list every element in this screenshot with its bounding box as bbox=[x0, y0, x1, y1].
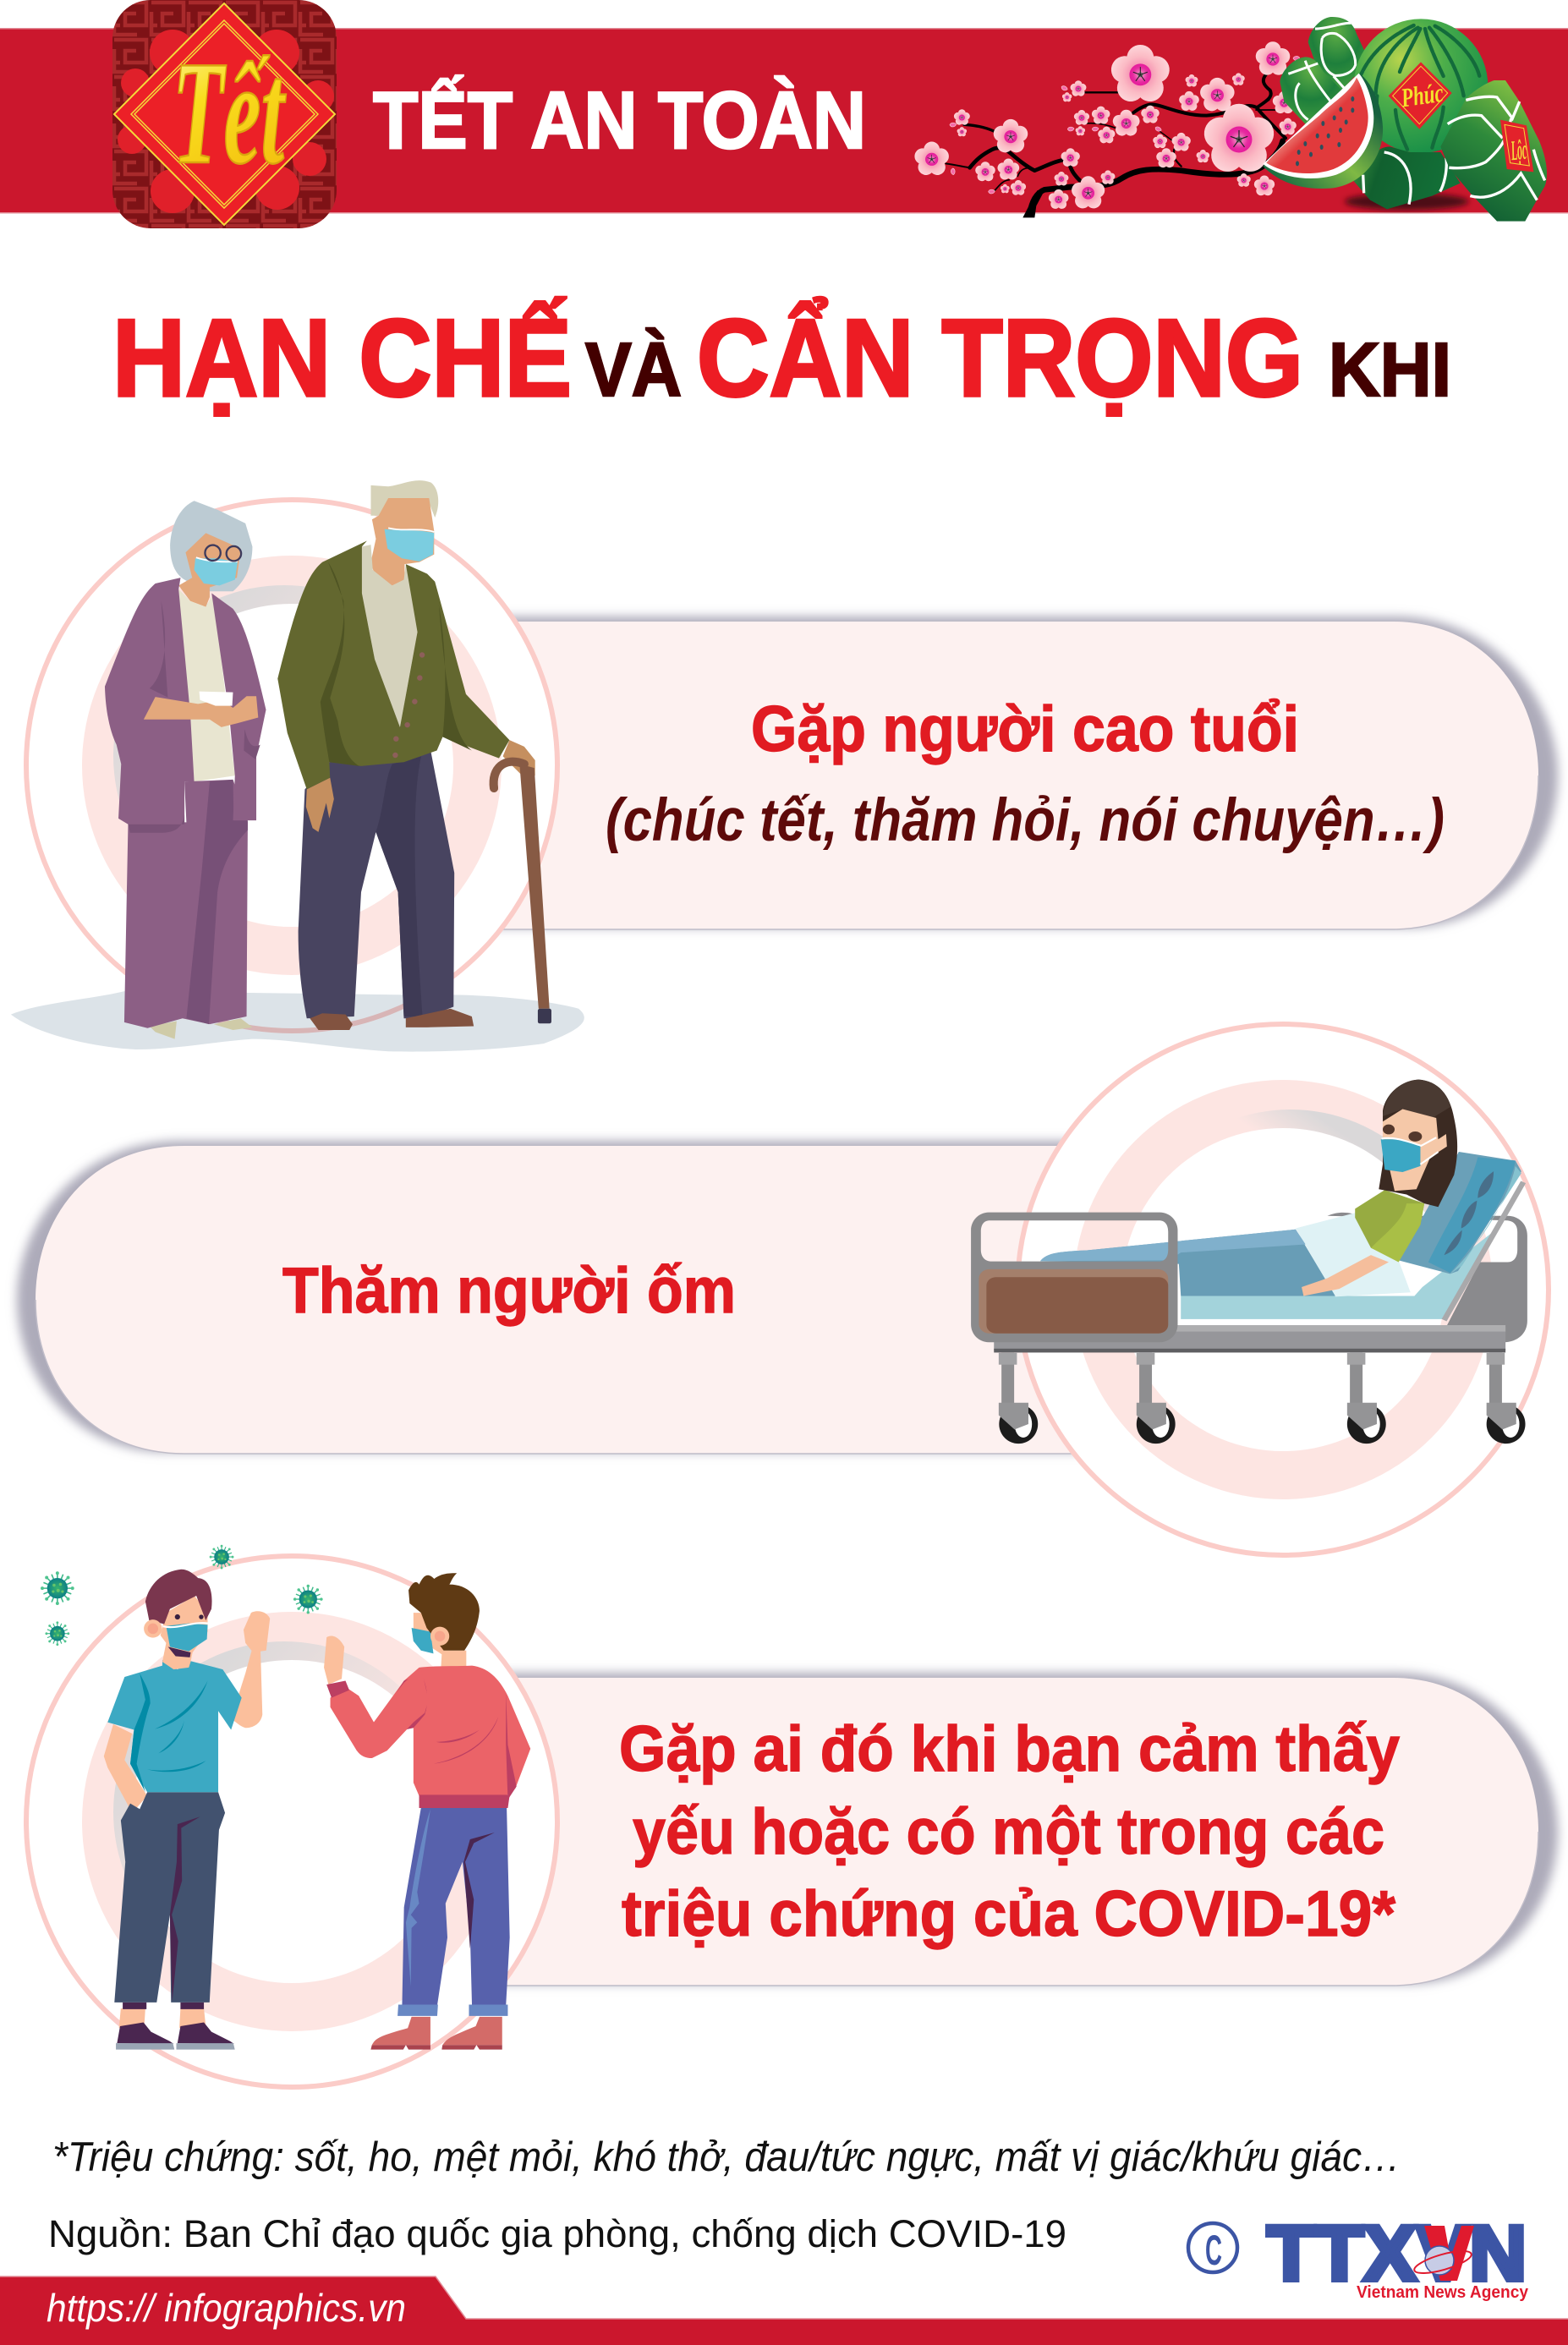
main heading: HẠN CHẾ bbox=[112, 296, 572, 419]
circle backdrop bbox=[1017, 1024, 1549, 1555]
header title: TẾT AN TOÀN bbox=[373, 74, 866, 166]
head frame bbox=[1327, 1213, 1527, 1342]
right man bbox=[324, 1573, 530, 2050]
left man bbox=[104, 1570, 270, 2050]
main heading bbox=[112, 296, 1451, 419]
pill: elderly bbox=[423, 616, 1558, 929]
circle backdrop bbox=[26, 1556, 557, 2087]
bánh chưng: right bbox=[1440, 80, 1547, 222]
bed base bbox=[994, 1325, 1505, 1352]
pillow bbox=[1399, 1152, 1521, 1274]
illustration: watermelon and bánh chưng bbox=[1263, 17, 1547, 222]
mattress bbox=[1181, 1182, 1521, 1319]
panel: elderly bbox=[11, 480, 1558, 1052]
watermelon slice bbox=[1263, 74, 1383, 189]
logo: copyright and TTXVN: Vietnam News Agency bbox=[1357, 2283, 1529, 2302]
pill: visiting the sick bbox=[17, 1141, 1099, 1454]
text: symptoms: yếu hoặc có một trong các bbox=[633, 1796, 1384, 1868]
head bbox=[1379, 1080, 1457, 1207]
ground shadow bbox=[11, 991, 584, 1052]
panel: visiting the sick bbox=[17, 1024, 1549, 1555]
icon: Tết tile bbox=[112, 0, 337, 228]
logo: copyright and TTXVN: TTXVN bbox=[1267, 2211, 1527, 2297]
text: meeting the elderly: (chúc tết, thăm hỏi, nói chuyện…) bbox=[606, 787, 1445, 854]
bánh chưng: top left bbox=[1308, 17, 1364, 90]
text: visiting the sick: Thăm người ốm bbox=[282, 1255, 736, 1327]
watermelon bbox=[1354, 19, 1488, 153]
man bbox=[277, 480, 551, 1030]
footer band with URL tab: https:// infographics.vn bbox=[47, 2286, 406, 2330]
illustration: two men greeting bbox=[41, 1545, 530, 2050]
panel: symptoms bbox=[26, 1545, 1558, 2087]
main heading: KHI bbox=[1329, 328, 1451, 413]
text: meeting the elderly: Gặp người cao tuổi bbox=[751, 693, 1299, 765]
shirt bbox=[1355, 1190, 1424, 1263]
text: symptoms bbox=[619, 1713, 1400, 1950]
bánh chưng: second bbox=[1280, 57, 1342, 124]
main heading: VÀ bbox=[585, 327, 682, 413]
footer band with URL tab bbox=[0, 2277, 1568, 2345]
illustration: elderly couple bbox=[11, 480, 584, 1052]
watermelon: Phúc bbox=[1399, 78, 1445, 113]
viruses bbox=[41, 1545, 323, 1646]
illustration: peach blossom branch bbox=[913, 41, 1300, 217]
main heading: CẨN TRỌNG bbox=[697, 296, 1303, 419]
source line: Nguồn: Ban Chỉ đạo quốc gia phòng, chống dịch COVID-19 bbox=[48, 2212, 1066, 2255]
text: symptoms: triệu chứng của COVID-19* bbox=[622, 1878, 1395, 1950]
bánh chưng: bottom bbox=[1353, 146, 1461, 209]
legs and wheels bbox=[999, 1353, 1526, 1444]
text: symptoms: Gặp ai đó khi bạn cảm thấy bbox=[619, 1713, 1400, 1785]
illustration: patient in hospital bed bbox=[971, 1080, 1527, 1444]
gown bbox=[1296, 1213, 1411, 1296]
foot rail bbox=[971, 1213, 1177, 1342]
bánh chưng: right: Lộc bbox=[1510, 134, 1528, 167]
arm bbox=[1302, 1255, 1389, 1296]
pill: symptoms bbox=[423, 1673, 1558, 1986]
logo: copyright and TTXVN: C bbox=[1205, 2227, 1222, 2274]
icon: Tết tile: Tết bbox=[173, 30, 286, 195]
woman bbox=[105, 501, 266, 1039]
blanket bbox=[1040, 1230, 1335, 1296]
header band bbox=[0, 28, 1568, 213]
circle backdrop bbox=[26, 500, 557, 1031]
footnote: symptoms: *Triệu chứng: sốt, ho, mệt mỏi, khó thở, đau/tức ngực, mất vị giác/khứu giác… bbox=[52, 2134, 1401, 2180]
text: meeting the elderly bbox=[606, 693, 1445, 854]
